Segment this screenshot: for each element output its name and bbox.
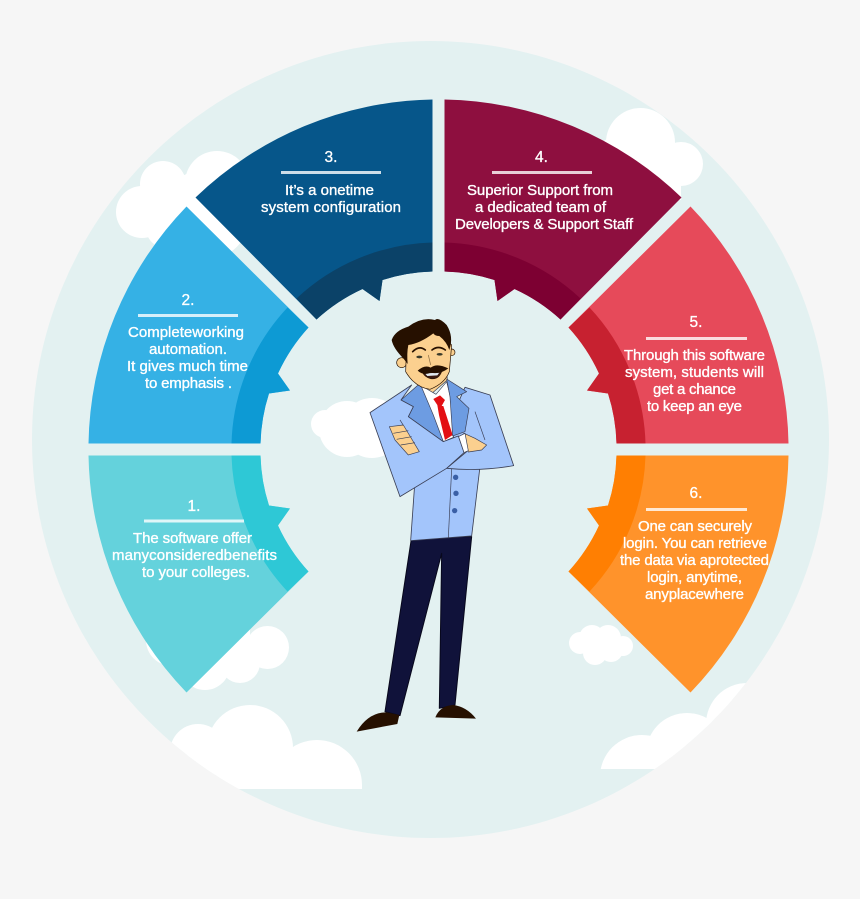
- text block: item 5: Through this software: [624, 347, 765, 364]
- sleeve seam: [475, 412, 485, 440]
- text block: item 1: The software offer: [133, 530, 252, 547]
- text block: item 2: It gives much time: [127, 358, 248, 375]
- shirt: [420, 382, 455, 442]
- face: [406, 330, 452, 389]
- ears: [397, 349, 455, 368]
- text block: item 6: 6.: [690, 485, 702, 502]
- text block: item 6: the data via aprotected: [620, 552, 769, 569]
- text block: item 1: [112, 498, 277, 581]
- nose: [428, 355, 431, 365]
- panel: segment 5: [568, 206, 788, 444]
- moustache: [418, 365, 448, 374]
- neck: [420, 368, 447, 395]
- segment 2 inner band: [232, 308, 308, 444]
- left lapel: [401, 383, 443, 442]
- trousers: [385, 537, 472, 716]
- text block: item 6: login. You can retrieve: [623, 535, 767, 552]
- segment 3 inner band: [296, 242, 432, 320]
- cloud: bottom left: [172, 705, 362, 789]
- mouth: [423, 372, 442, 379]
- segment 1 body: [88, 456, 308, 692]
- text block: item 4: a dedicated team of: [475, 199, 607, 216]
- man: upper body: [370, 319, 514, 541]
- jacket front seam: [448, 468, 452, 538]
- text block: item 3: It’s a onetime: [285, 182, 374, 199]
- text block: item 5: to keep an eye: [647, 398, 742, 415]
- segment 4 body: [444, 100, 682, 320]
- panel: segment 6: [568, 456, 788, 692]
- text block: item 6: [620, 485, 769, 603]
- text block: item 3: 3.: [325, 149, 337, 166]
- man: legs and shoes: [357, 537, 476, 732]
- jacket torso: [411, 443, 480, 541]
- text block: item 5: [624, 314, 765, 415]
- left sleeve: [370, 385, 464, 497]
- segment 5 body: [568, 206, 788, 444]
- text block: item 2: Completeworking: [128, 324, 244, 341]
- panel: segment 2: [88, 206, 308, 444]
- cloud: upper right: [604, 108, 703, 200]
- segment 6 inner band: [568, 456, 646, 592]
- left hand: [389, 425, 419, 455]
- cloud: bottom right: [600, 683, 746, 769]
- segment 1 inner band: [232, 456, 308, 592]
- text block: item 1: manyconsideredbenefits: [112, 547, 277, 564]
- segment 4 inner band: [444, 242, 580, 320]
- text block: item 4: Developers & Support Staff: [455, 216, 634, 233]
- cloud: lower left: [146, 626, 289, 690]
- right hand: [459, 433, 487, 452]
- tie: [433, 395, 453, 440]
- chest and right sleeve: [447, 387, 514, 470]
- text block: item 4: Superior Support from: [467, 182, 613, 199]
- segment 3 body: [196, 100, 432, 320]
- text block: item 3: system configuration: [261, 199, 401, 216]
- text block: item 5: 5.: [690, 314, 702, 331]
- left shoe: [357, 712, 399, 732]
- illustration: man with crossed arms: [357, 319, 514, 732]
- text block: item 5: get a chance: [653, 381, 736, 398]
- panel: segment 4: [444, 100, 682, 320]
- right lapel: [447, 379, 469, 436]
- text block: item 6: login, anytime,: [647, 569, 742, 586]
- text block: item 3: [261, 149, 401, 216]
- finger lines: [393, 420, 415, 445]
- text block: item 2: 2.: [182, 292, 194, 309]
- text block: item 5: system, students will: [625, 364, 764, 381]
- text block: item 4: [455, 149, 634, 233]
- text block: item 2: to emphasis .: [145, 375, 232, 392]
- text block: item 6: One can securely: [638, 518, 752, 535]
- panel: segment 1: [88, 456, 308, 692]
- text block: item 2: [127, 292, 248, 392]
- hair: [392, 319, 451, 364]
- text block: item 1: to your colleges.: [142, 564, 250, 581]
- text block: item 1: 1.: [188, 498, 200, 515]
- cloud: small right: [569, 625, 633, 665]
- text block: item 4: 4.: [535, 149, 548, 166]
- segment 2 body: [88, 206, 308, 444]
- right shoe: [435, 705, 476, 719]
- panel: segment 3: [196, 100, 432, 320]
- clouds: [116, 108, 830, 830]
- teeth: [425, 373, 439, 376]
- text block: item 6: anyplacewhere: [645, 586, 744, 603]
- segment 6 body: [568, 456, 788, 692]
- segment 5 inner band: [568, 308, 646, 444]
- jacket buttons: [452, 475, 459, 513]
- eyebrows: [413, 347, 445, 352]
- text block: item 2: automation.: [149, 341, 227, 358]
- cloud: behind man: [311, 398, 386, 458]
- shirt cuff: [458, 433, 468, 453]
- cloud: upper left: [116, 151, 240, 251]
- eyes: [416, 353, 443, 358]
